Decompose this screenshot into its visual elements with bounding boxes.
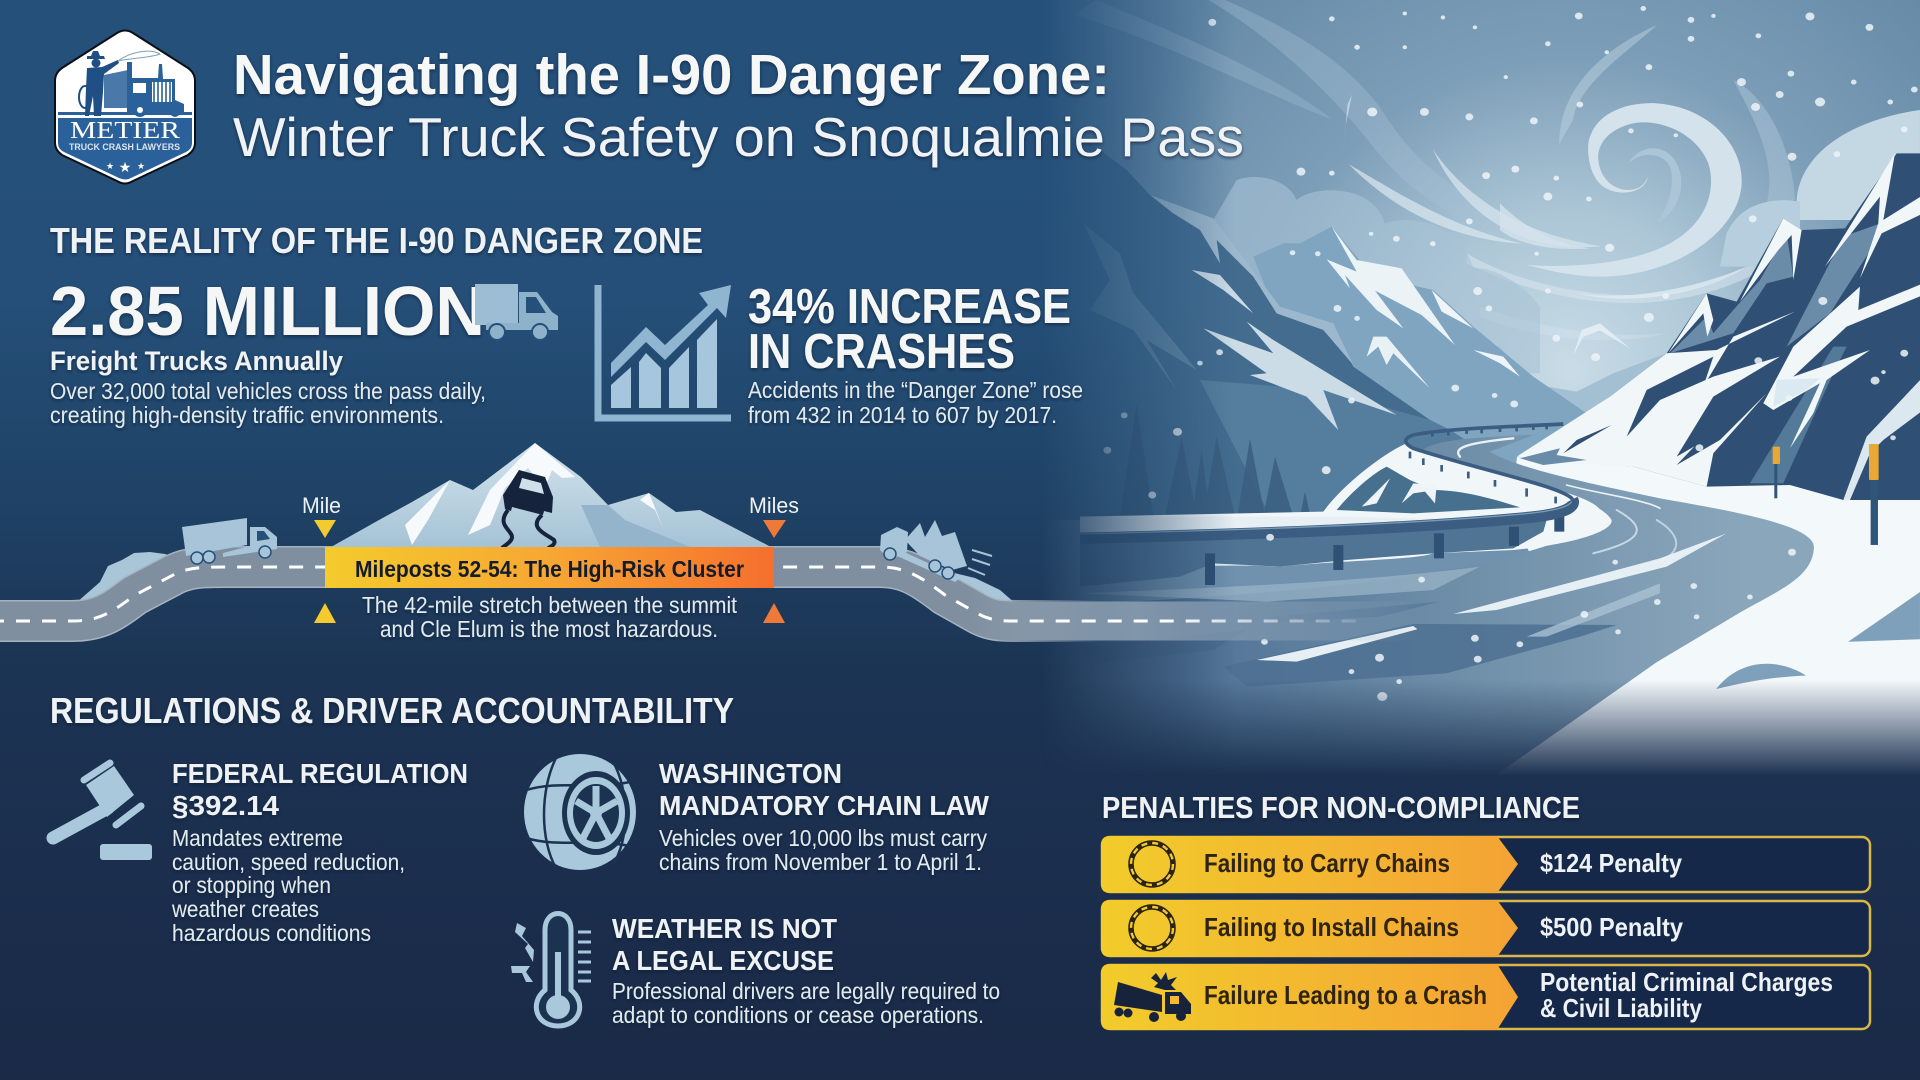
weather heading: WEATHER IS NOT bbox=[612, 913, 837, 944]
penalty row: carry chains bbox=[1101, 836, 1870, 893]
mile marker left bbox=[302, 493, 341, 623]
left mountain bbox=[1082, 146, 1464, 516]
federal heading: §392.14 bbox=[172, 790, 279, 821]
snow ground bbox=[1504, 457, 1920, 770]
logo stars bbox=[106, 159, 145, 175]
spiral and clouds bbox=[1467, 80, 1920, 430]
stat headline: 34% INCREASE bbox=[748, 280, 1071, 334]
icon: crashing truck bbox=[1114, 972, 1191, 1022]
washington heading bbox=[659, 758, 990, 821]
heading: regulations: REGULATIONS & DRIVER ACCOUNTABILITY bbox=[50, 690, 734, 731]
penalty row: failure leading to crash bbox=[1101, 964, 1870, 1030]
guardrail shadow bbox=[1080, 520, 1547, 587]
stat description bbox=[748, 377, 1083, 428]
mile marker left: Mile bbox=[302, 493, 341, 518]
icon: crashed truck bbox=[880, 520, 992, 582]
icon: chain ring bbox=[1131, 843, 1173, 885]
stat: 34% increase in crashes bbox=[748, 280, 1083, 428]
penalty row: failure leading to crash: Failure Leading to a Crash bbox=[1204, 980, 1487, 1010]
centre mountain bbox=[1253, 227, 1587, 470]
penalty row: failure leading to crash: Potential Criminal Charges bbox=[1540, 967, 1833, 997]
centre and left mountains bbox=[1082, 146, 1586, 516]
penalty row: install chains bbox=[1101, 900, 1870, 957]
penalty row: install chains: Failing to Install Chains bbox=[1204, 912, 1459, 942]
snow verge bbox=[1080, 444, 1612, 567]
federal body: weather creates bbox=[171, 896, 319, 922]
washington heading: MANDATORY CHAIN LAW bbox=[659, 790, 990, 821]
logo stars: ★ bbox=[106, 161, 114, 171]
penalty row: failure leading to crash: & Civil Liability bbox=[1540, 993, 1702, 1023]
logo tagline: TRUCK CRASH LAWYERS bbox=[69, 142, 180, 153]
federal body: or stopping when bbox=[172, 872, 331, 898]
washington body: Vehicles over 10,000 lbs must carry bbox=[659, 825, 987, 851]
washington body bbox=[659, 825, 987, 875]
road bbox=[0, 567, 1430, 621]
mile marker right bbox=[749, 493, 799, 623]
pine trees bbox=[1166, 438, 1310, 514]
right cliffs bbox=[1517, 153, 1920, 500]
guardrail bbox=[1080, 424, 1573, 585]
snowfall bbox=[1103, 6, 1918, 701]
weather body: Professional drivers are legally required to bbox=[612, 978, 1000, 1004]
federal body: hazardous conditions bbox=[172, 920, 371, 946]
stat description bbox=[50, 378, 486, 428]
penalty row: carry chains: $124 Penalty bbox=[1540, 848, 1682, 878]
icon: sliding car bbox=[502, 470, 555, 548]
wind bands top bbox=[1074, 0, 1657, 249]
weather heading bbox=[612, 913, 837, 976]
stat description: from 432 in 2014 to 607 by 2017. bbox=[748, 402, 1057, 428]
mountain bbox=[331, 443, 771, 547]
logo lower band bbox=[58, 118, 192, 180]
federal body bbox=[171, 825, 405, 946]
road lines bbox=[1257, 533, 1727, 662]
stat description: Over 32,000 total vehicles cross the pass daily, bbox=[50, 378, 486, 404]
snowy knoll bbox=[1337, 467, 1520, 513]
federal heading bbox=[172, 758, 468, 821]
road and verge bbox=[1030, 403, 1814, 780]
banner: high-risk cluster bbox=[325, 547, 774, 588]
washington body: chains from November 1 to April 1. bbox=[659, 849, 982, 875]
heading: the reality: THE REALITY OF THE I-90 DANGER ZONE bbox=[50, 220, 703, 261]
stat headline bbox=[748, 280, 1071, 379]
chart arrow bbox=[611, 285, 731, 377]
logo cowboy bbox=[79, 51, 119, 116]
stat headline: IN CRASHES bbox=[748, 325, 1015, 379]
logo name: METIER bbox=[70, 118, 180, 144]
icon: tire with chains bbox=[524, 754, 636, 870]
federal body: Mandates extreme bbox=[172, 825, 343, 851]
block: weather is not a legal excuse bbox=[612, 913, 1000, 1028]
stat description: creating high-density traffic environments. bbox=[50, 402, 444, 428]
road diagram bbox=[0, 443, 1430, 642]
federal heading: FEDERAL REGULATION bbox=[172, 758, 468, 789]
logo truck bbox=[104, 62, 184, 117]
snow streaks bbox=[1517, 153, 1920, 487]
mile marker right: Miles bbox=[749, 493, 799, 518]
road surface shading bbox=[1080, 567, 1660, 687]
stat label: Freight Trucks Annually bbox=[50, 346, 343, 376]
valley floor bbox=[1076, 520, 1529, 587]
chart axes bbox=[598, 285, 731, 418]
weather body: adapt to conditions or cease operations. bbox=[612, 1002, 984, 1028]
penalty row: carry chains: Failing to Carry Chains bbox=[1204, 848, 1450, 878]
cloud bank bbox=[1213, 177, 1540, 373]
road surface bbox=[1089, 435, 1814, 770]
icon: gavel bbox=[53, 763, 152, 860]
block: washington chain law bbox=[659, 758, 990, 875]
snow drifts bbox=[1716, 592, 1920, 689]
diagram caption bbox=[362, 592, 738, 642]
sky bbox=[1068, 0, 1920, 392]
panel: penalties bbox=[1101, 790, 1870, 1030]
icon: thermometer with lightning bbox=[511, 914, 591, 1026]
logo: Metier Truck Crash Lawyers badge bbox=[55, 30, 195, 184]
penalty row: install chains: $500 Penalty bbox=[1540, 912, 1683, 942]
penalties heading: PENALTIES FOR NON-COMPLIANCE bbox=[1102, 790, 1580, 825]
banner text: Mileposts 52-54: The High-Risk Cluster bbox=[355, 556, 744, 582]
illustration: snowy mountain pass bbox=[1060, 0, 1920, 772]
diagram caption: and Cle Elum is the most hazardous. bbox=[380, 616, 718, 642]
title line 2: Winter Truck Safety on Snoqualmie Pass bbox=[233, 106, 1244, 168]
icon: delivery truck bbox=[475, 284, 558, 340]
title line 1: Navigating the I-90 Danger Zone: bbox=[233, 43, 1110, 107]
road centre line bbox=[0, 567, 1365, 621]
weather heading: A LEGAL EXCUSE bbox=[612, 945, 834, 976]
stat: 2.85 million freight trucks bbox=[50, 272, 486, 428]
road signs bbox=[1773, 444, 1879, 545]
icon: chain ring bbox=[1131, 907, 1173, 949]
snow banks bbox=[76, 552, 1016, 610]
block: federal regulation bbox=[171, 758, 468, 946]
big number: 2.85 MILLION bbox=[50, 272, 485, 350]
weather body bbox=[612, 978, 1000, 1028]
washington heading: WASHINGTON bbox=[659, 758, 842, 789]
stat description: Accidents in the “Danger Zone” rose bbox=[748, 377, 1083, 403]
title bbox=[233, 43, 1244, 168]
road edge bbox=[0, 567, 1100, 621]
logo stars: ★ bbox=[137, 161, 145, 171]
logo stars: ★ bbox=[119, 159, 131, 175]
diagram caption: The 42-mile stretch between the summit bbox=[362, 592, 738, 618]
icon: truck entering bbox=[182, 518, 277, 564]
chart bars bbox=[611, 319, 717, 408]
icon: rising crash chart bbox=[598, 285, 731, 418]
federal body: caution, speed reduction, bbox=[172, 849, 405, 875]
